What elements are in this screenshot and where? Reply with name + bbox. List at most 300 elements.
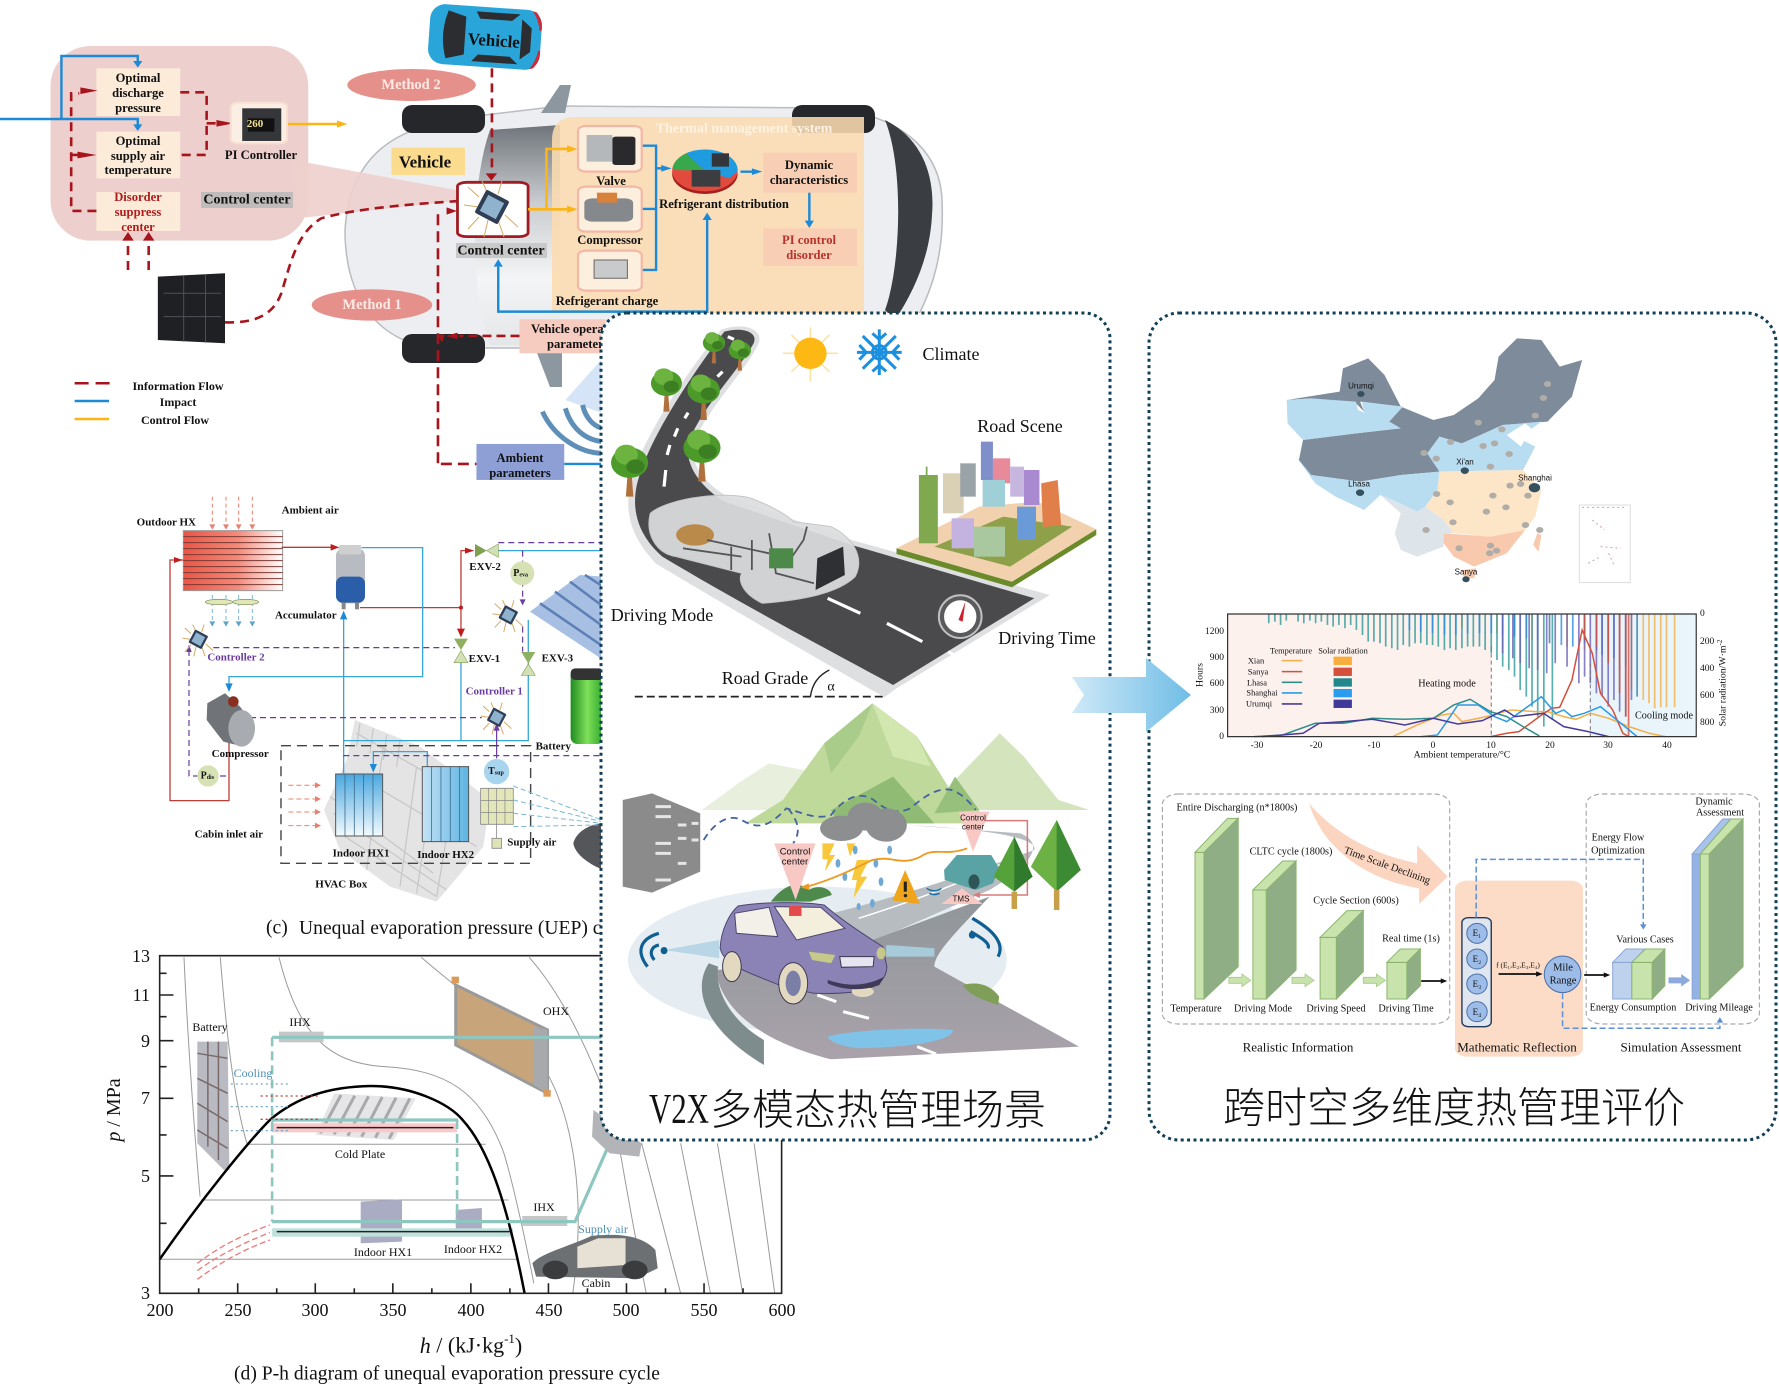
temperature mode dividers	[1491, 647, 1590, 737]
arrow: scene to evaluation	[1072, 658, 1191, 732]
block: energy consumption	[1613, 949, 1665, 999]
map of China: Shanghai	[1518, 474, 1552, 482]
red arrowheads	[77, 87, 234, 241]
component labels: Indoor HX2	[417, 849, 475, 861]
diagram labels: Cold Plate	[335, 1147, 385, 1161]
box: optimal discharge pressure	[96, 68, 180, 116]
projection wedge	[293, 160, 459, 218]
chart annotation labels: Lhasa	[1247, 678, 1267, 688]
panel: a vehicle control architecture	[0, 3, 942, 480]
chart tick labels: -10	[1368, 741, 1381, 751]
control center labels: center	[782, 856, 808, 868]
refrigerant lines: low pressure	[229, 548, 602, 773]
y axis tick labels: 11	[133, 985, 150, 1005]
ellipse: method 1	[312, 289, 432, 321]
y axis tick labels: 5	[141, 1166, 150, 1186]
scene labels	[611, 344, 1096, 694]
component labels: Compressor	[212, 748, 269, 760]
icon: IHX blocks	[279, 1032, 567, 1226]
icon: purple SUV	[720, 903, 887, 1004]
x axis tick labels: 250	[224, 1300, 252, 1320]
component labels: parameters	[547, 337, 609, 351]
energy flow links	[1476, 859, 1723, 1028]
sensors: dis	[207, 775, 215, 781]
component labels: Supply air	[507, 837, 557, 849]
diagram labels: Indoor HX1	[354, 1245, 412, 1259]
E parameter stack	[1462, 918, 1491, 1027]
vehicle tag	[391, 148, 465, 175]
x axis title: -1	[504, 1330, 515, 1346]
component labels: Indoor HX1	[333, 848, 390, 860]
step arrows	[1229, 974, 1385, 987]
icon: teal car	[944, 855, 999, 890]
E labels: E₁	[1473, 928, 1481, 938]
icon: accumulator	[336, 545, 365, 609]
chart tick labels: 200	[1700, 637, 1714, 647]
scene labels: α	[827, 680, 835, 694]
icon: outdoor HX	[183, 531, 283, 591]
mile range circle	[1544, 956, 1581, 993]
ellipse: method 2	[347, 69, 476, 101]
PI controller frame	[231, 103, 287, 143]
component labels: EXV-1	[469, 653, 500, 665]
arrow to mileage	[1669, 974, 1690, 987]
panel: V2X multi-modal thermal management scene	[601, 313, 1110, 1140]
road	[628, 326, 1050, 697]
method labels: Method 1	[342, 297, 402, 313]
panel: d P-h diagram	[103, 946, 796, 1384]
component labels: Outdoor HX	[137, 516, 196, 528]
icon: sun	[783, 327, 838, 382]
x axis tick labels: 300	[302, 1300, 328, 1320]
icon: cold plate	[316, 1093, 416, 1140]
road grade angle	[810, 670, 829, 697]
legend labels: Control Flow	[141, 413, 209, 427]
panel title: 多模态热管理场景	[710, 1086, 1046, 1134]
legend labels	[132, 379, 224, 427]
blue input arrowheads	[133, 61, 142, 131]
legend labels: Information Flow	[132, 379, 224, 393]
chart tick labels: -30	[1251, 741, 1264, 751]
component labels: Vehicle operating	[531, 322, 625, 336]
icon: evaporator stack	[530, 575, 603, 660]
flow diagram labels: Cycle Section (600s)	[1313, 896, 1399, 906]
chip center	[464, 181, 518, 237]
icon: translucent car chassis	[649, 495, 859, 603]
flow diagram: time scale evaluation	[1162, 794, 1759, 1057]
flow diagram labels: Energy Flow	[1592, 832, 1645, 844]
icon: cabin fragment	[573, 823, 603, 870]
chart tick labels: 300	[1210, 706, 1224, 716]
chart annotation labels: Temperature	[1270, 646, 1312, 656]
group captions: Realistic Information	[1243, 1040, 1354, 1054]
map of China	[1287, 338, 1630, 583]
block: driving mode	[1253, 861, 1296, 999]
panel: cross space-time multidimensional evaluation	[1149, 313, 1776, 1140]
cabin air arrows	[288, 782, 602, 829]
icon: roadside bush	[963, 983, 999, 1005]
control center labels: Control	[780, 846, 810, 858]
TMS link	[973, 821, 1027, 898]
icon: server tower	[623, 793, 700, 893]
panel frame	[601, 313, 1110, 1140]
component labels: PI control	[782, 233, 836, 247]
chart annotation labels: Cooling mode	[1635, 710, 1693, 722]
chart axis titles: Hours	[1194, 663, 1206, 687]
time scale declining label: Time Scale Declining	[1342, 845, 1432, 887]
chart tick labels: 400	[1700, 664, 1714, 674]
diagram labels: OHX	[543, 1004, 569, 1018]
impact line to ambient	[564, 463, 608, 465]
legend labels: Impact	[160, 395, 196, 409]
chart annotation labels	[1246, 646, 1693, 722]
saturation dome	[160, 1086, 525, 1293]
icon: controller chips	[182, 600, 523, 734]
chart: ambient temperature histogram	[1194, 609, 1728, 760]
flow diagram labels: Entire Discharging (n*1800s)	[1177, 802, 1297, 814]
component frame: refrigerant charge	[578, 251, 642, 291]
icon: EXV valves	[454, 544, 535, 675]
box: ambient parameters	[476, 444, 564, 480]
impact lines	[494, 146, 814, 312]
icon: top vehicle	[427, 3, 543, 71]
panel: c unequal evaporation pressure cycle	[137, 497, 634, 938]
puddle	[828, 1029, 953, 1048]
component labels: Refrigerant distribution	[659, 197, 789, 211]
chart tick labels: -20	[1310, 741, 1323, 751]
box: vehicle operating parameters	[519, 319, 606, 353]
y axis tick labels: 7	[141, 1088, 150, 1108]
E labels: E₄	[1473, 1007, 1481, 1017]
PI controller device	[242, 108, 281, 141]
icon: supply air grid	[481, 788, 513, 848]
mile range label	[1550, 962, 1577, 986]
flow diagram labels: Assessment	[1696, 808, 1744, 818]
chart tick labels: 10	[1486, 741, 1496, 751]
icon: mountains	[702, 703, 1089, 823]
group captions: Simulation Assessment	[1621, 1040, 1742, 1054]
group captions: Mathematic Reflection	[1457, 1040, 1577, 1054]
block: driving mileage	[1692, 819, 1743, 999]
control center chip frame	[457, 182, 528, 237]
orange data flow	[800, 848, 967, 890]
component labels: disorder	[786, 248, 832, 262]
chart axis titles: Ambient temperature/°C	[1414, 750, 1510, 760]
chart axis titles: Solar radiation/W·m	[1718, 646, 1728, 726]
signal beam	[565, 358, 603, 413]
E labels: E₃	[1473, 979, 1481, 989]
HVAC box outline	[281, 746, 531, 863]
chart tick labels: 1200	[1205, 627, 1224, 637]
diagram labels: Supply air	[578, 1222, 628, 1236]
icon: right signal	[886, 918, 1000, 957]
control center labels: Control	[960, 814, 986, 822]
chart tick labels: 600	[1700, 691, 1714, 701]
sensors: T	[488, 766, 495, 777]
time scale arrow	[1309, 803, 1448, 904]
control box text: PI Controller	[225, 148, 297, 162]
x axis tick labels: 600	[768, 1300, 796, 1320]
x axis tick labels: 200	[146, 1300, 174, 1320]
chart annotation labels: Heating mode	[1418, 678, 1476, 690]
plot axes	[160, 956, 782, 1293]
control box text: Disorder	[114, 190, 162, 204]
chart annotation labels: Shanghai	[1246, 688, 1278, 698]
diagram labels: IHX	[289, 1015, 311, 1029]
chart legend swatches	[1282, 657, 1352, 708]
component labels: EXV-3	[542, 652, 574, 664]
block: driving speed	[1320, 911, 1363, 999]
y axis title: p / MPa	[103, 1078, 125, 1144]
road lines	[817, 995, 936, 1054]
chart annotation labels: Solar radiation	[1318, 646, 1369, 656]
control center tag: Control center	[203, 192, 291, 208]
chart tick labels: 0	[1700, 609, 1705, 619]
flow diagram labels: Energy Consumption	[1590, 1002, 1676, 1014]
map of China: Xi'an	[1456, 458, 1474, 466]
chart tick labels: 40	[1662, 741, 1672, 751]
diagram labels: Battery	[192, 1020, 228, 1034]
icon: snowflake	[857, 329, 902, 375]
control center caption: Control center	[457, 244, 545, 258]
block: temperature	[1195, 818, 1238, 999]
PI display: 260	[247, 118, 264, 130]
control signal lines	[189, 543, 602, 776]
vehicle tag text: Vehicle	[399, 152, 452, 172]
control center labels: center	[962, 822, 984, 832]
flow diagram labels: f (E₁,E₂,E₃,E₄)	[1496, 960, 1540, 970]
component labels: parameters	[489, 466, 551, 480]
thermal management zone	[552, 117, 864, 313]
mile range label: Range	[1550, 976, 1577, 986]
icon: indoor HX2	[456, 1208, 482, 1236]
flow diagram labels: Real time (1s)	[1382, 934, 1440, 944]
x axis tick labels: 350	[380, 1300, 406, 1320]
group captions	[1243, 1040, 1742, 1054]
x axis tick labels	[146, 1300, 796, 1320]
control box text: center	[121, 220, 155, 234]
method labels	[342, 77, 441, 313]
solar radiation bars	[1269, 614, 1675, 737]
black flow arrows	[1421, 971, 1610, 984]
chart axis titles	[1194, 639, 1728, 760]
x axis title: h / (kJ·kg	[420, 1332, 504, 1358]
control box text: temperature	[105, 163, 172, 177]
icon: bush	[771, 885, 832, 902]
y axis tick labels: 13	[132, 946, 150, 966]
component labels	[137, 505, 574, 890]
method 1 flow	[438, 207, 519, 464]
chart tick labels: 600	[1210, 679, 1224, 689]
flow diagram labels: Temperature	[1170, 1004, 1222, 1014]
icon: city block	[897, 442, 1096, 587]
sensors: sup	[495, 771, 504, 777]
yellow control flow	[528, 145, 577, 213]
refrigerant distribution pie	[672, 149, 738, 194]
icon: compressor	[592, 1110, 642, 1157]
icon: compressor	[207, 693, 255, 747]
component labels: Controller 1	[466, 685, 523, 697]
scene labels: Driving Mode	[611, 605, 713, 625]
y axis tick labels: 9	[141, 1031, 150, 1051]
server information flow	[225, 201, 459, 322]
chart annotation labels: Xian	[1248, 656, 1265, 666]
icon: battery	[571, 668, 604, 744]
icon: speedometer	[939, 595, 982, 638]
sensors: eva	[519, 572, 528, 578]
sensors	[197, 561, 534, 787]
diagram labels	[192, 1004, 628, 1290]
control box text: suppress	[115, 205, 161, 219]
x axis tick labels: 400	[458, 1300, 484, 1320]
box: disorder suppress center	[96, 192, 180, 231]
box: optimal supply air temperature	[96, 132, 180, 178]
component labels: Valve	[596, 174, 626, 188]
diagram labels: Cooling	[234, 1066, 272, 1080]
far road	[804, 825, 1035, 940]
control center labels: TMS	[953, 894, 969, 904]
component frame: compressor	[578, 187, 642, 232]
x axis tick labels: 450	[536, 1300, 562, 1320]
purple arrowheads	[186, 599, 526, 731]
scene labels: Road Scene	[977, 416, 1063, 436]
chart backgrounds	[1228, 614, 1696, 737]
sensors: P	[201, 770, 207, 781]
road grade reference	[635, 696, 886, 698]
component labels: Ambient	[497, 451, 544, 465]
process bands	[272, 1123, 513, 1237]
diagram labels: Indoor HX2	[444, 1242, 502, 1256]
junction dot	[459, 606, 463, 610]
mile range label: Mile	[1553, 962, 1573, 974]
component labels: Ambient air	[282, 505, 339, 517]
scene labels: Road Grade	[722, 668, 808, 688]
ambient air arrows	[209, 497, 255, 627]
scene labels: Driving Time	[998, 628, 1096, 648]
x axis tick labels: 550	[690, 1300, 718, 1320]
near road	[716, 897, 1079, 1059]
E labels	[1473, 928, 1481, 1017]
component labels	[489, 122, 848, 480]
chart tick labels: 800	[1700, 718, 1714, 728]
component frame: valve	[578, 126, 642, 172]
box: dynamic characteristics	[763, 153, 857, 193]
icon: trees	[611, 332, 751, 497]
component labels: Refrigerant charge	[556, 294, 659, 308]
icon: rain and lightning	[822, 843, 892, 910]
flow diagram labels: Driving Speed	[1306, 1004, 1366, 1014]
flow diagram labels	[1170, 796, 1753, 1014]
box: PI control disorder	[763, 228, 857, 266]
icon: indoor HX1	[336, 774, 383, 836]
icon: HVAC body	[324, 720, 490, 902]
icon: indoor HX2	[422, 767, 469, 842]
caption c: Unequal evaporation pressure (UEP) cycle	[299, 918, 634, 938]
component labels: Controller 2	[207, 651, 265, 663]
mathematic reflection block	[1455, 881, 1583, 1057]
component labels: characteristics	[770, 173, 848, 187]
signal arcs	[542, 405, 603, 453]
icon: left signal	[641, 933, 719, 967]
information flows inside the control center	[71, 92, 217, 270]
panel title: 跨时空多维度热管理评价	[1223, 1084, 1685, 1132]
component labels: Battery	[536, 741, 572, 753]
flow diagram labels: Optimization	[1591, 846, 1645, 856]
y axis tick labels: 3	[141, 1283, 150, 1303]
chart annotation labels: Urumqi	[1246, 700, 1273, 708]
caption c: (c)	[266, 918, 288, 938]
yellow control arrow	[287, 120, 347, 128]
chart tick labels: 20	[1545, 741, 1555, 751]
isotherm curves	[160, 957, 775, 1293]
component labels: Accumulator	[275, 610, 337, 622]
control center beam left	[774, 843, 816, 900]
control box text: Optimal	[116, 134, 161, 148]
flow diagram labels: CLTC cycle (1800s)	[1250, 846, 1332, 858]
control box text: supply air	[111, 149, 166, 163]
flow diagram labels: Driving Mode	[1234, 1004, 1292, 1014]
refrigerant lines: high pressure	[170, 547, 467, 801]
diagram labels: IHX	[533, 1200, 555, 1214]
icon: trees low poly	[994, 820, 1081, 910]
flow diagram labels: Dynamic	[1695, 796, 1733, 808]
scene labels: Climate	[922, 344, 980, 364]
TMS signal arcs	[927, 888, 941, 895]
icon: indoor HX1	[361, 1199, 402, 1243]
chart annotation labels: Sanya	[1248, 668, 1269, 676]
road shoulder	[702, 963, 764, 1065]
icon: vehicle body top view	[345, 85, 942, 387]
double arrows	[277, 1128, 510, 1232]
control box text: pressure	[115, 101, 161, 115]
x axis title: )	[515, 1332, 522, 1358]
control box text	[105, 71, 297, 234]
icon: server	[158, 273, 225, 343]
method 2 flow	[486, 68, 497, 181]
x axis tick labels: 500	[612, 1300, 640, 1320]
legend lines	[75, 383, 110, 419]
y axis tick labels	[132, 946, 150, 1303]
component labels: Thermal management system	[656, 122, 833, 136]
input blue lines	[0, 56, 138, 125]
control box text: Optimal	[116, 71, 161, 85]
dashed groups	[1162, 794, 1759, 1024]
flow diagram labels: Various Cases	[1616, 934, 1674, 946]
component labels: HVAC Box	[315, 878, 368, 890]
map of China: Sanya	[1455, 568, 1478, 576]
chart axis titles: -2	[1716, 639, 1724, 646]
chart frame	[1228, 614, 1696, 737]
icon: battery pack	[197, 1042, 229, 1170]
sensors: P	[513, 568, 519, 579]
pale ground ellipse	[628, 887, 1007, 1033]
temperature curves	[1254, 630, 1666, 737]
map of China: Urumqi	[1348, 382, 1374, 390]
panel title: V2X	[649, 1087, 709, 1133]
E labels: E₂	[1473, 954, 1481, 964]
icon: storm cloud	[820, 803, 907, 842]
diagram labels: Cabin	[582, 1276, 610, 1290]
map of China: Lhasa	[1348, 480, 1370, 488]
icon: top vehicle: Vehicle	[467, 29, 521, 52]
caption d: (d) P-h diagram of unequal evaporation pressure cycle	[234, 1364, 660, 1384]
control center beam right	[959, 812, 990, 852]
chart tick labels: 0	[1219, 732, 1224, 742]
chart tick labels	[1205, 609, 1714, 751]
panel frame	[1149, 313, 1776, 1140]
component labels: Compressor	[577, 233, 643, 247]
component labels: EXV-2	[469, 561, 501, 573]
